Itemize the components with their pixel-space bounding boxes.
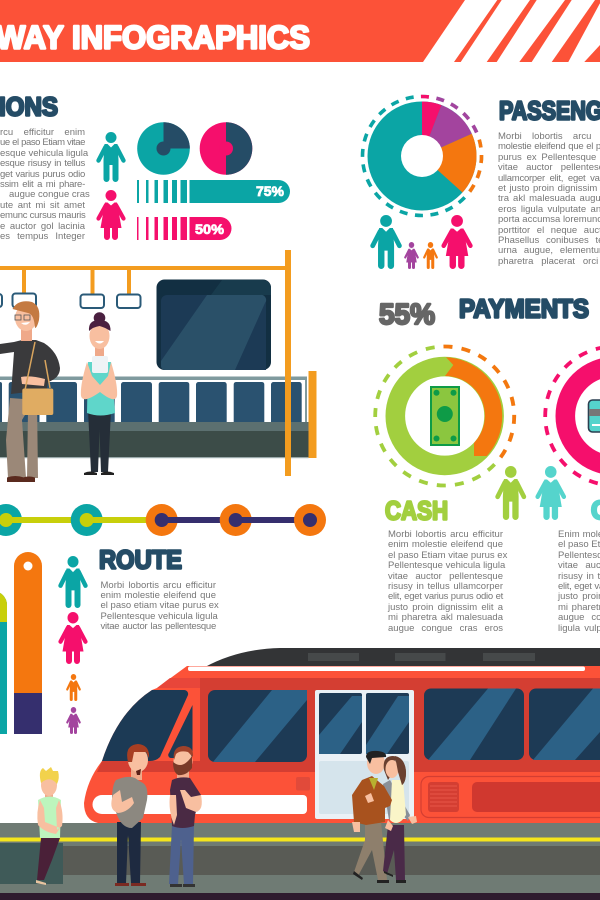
icon: woman cyan	[538, 466, 564, 520]
text block: cash: Morbi lobortis arcu efficitur	[388, 529, 503, 540]
text block: cash: justo proin dignissim elit a	[388, 602, 503, 613]
window	[529, 688, 600, 760]
progress bar: 75%: 75%	[256, 183, 285, 199]
person: bearded man	[169, 746, 202, 887]
header diagonal stripes	[454, 0, 600, 62]
person: man talking	[111, 744, 149, 886]
hand rail	[0, 266, 288, 294]
text block: stations: ute ant mi sit amet	[0, 200, 85, 211]
icon: woman pink	[98, 190, 124, 240]
icon: banknote	[431, 387, 459, 445]
person: couple	[352, 751, 417, 883]
scene: subway car interior	[0, 250, 316, 482]
icons: passenger family	[373, 215, 470, 269]
text block: cash: elit, eget varius purus odio et	[388, 591, 503, 602]
progress bar: 75%	[137, 180, 290, 203]
pie: teal share	[137, 122, 190, 175]
text block: route: el paso etiam vitae purus ex	[100, 600, 219, 611]
platform	[0, 823, 600, 900]
text block: stations: ssim elit a mi phare-	[0, 179, 85, 190]
donut: card	[544, 345, 600, 487]
text block: cash	[388, 529, 508, 634]
donut: cash	[374, 345, 515, 487]
front stripe	[92, 795, 307, 814]
heading: cash: CASH	[385, 496, 448, 526]
heading: stations: IONS	[0, 92, 58, 122]
stat: 55%: 55%	[379, 299, 435, 331]
icon: card	[588, 400, 600, 432]
text block: route: enim molestie eleifend que	[100, 590, 216, 601]
text block: cash: el paso Etiam vitae purus ex	[388, 550, 507, 561]
text block: route: vitae auctor las pellentesque	[100, 621, 216, 632]
train	[84, 648, 600, 823]
text block: cash: risusy in tellus ullamcorper	[388, 581, 503, 592]
person: man with bag	[0, 301, 60, 482]
window	[208, 690, 307, 762]
text block: cash: enim molestie eleifend que	[388, 539, 503, 550]
windshield	[102, 690, 192, 761]
text block: cash: Pellentesque vehicula ligula	[388, 560, 505, 571]
progress bar: 50%: 50%	[195, 221, 225, 237]
text block: stations: ue el paso Etiam vitae	[0, 137, 85, 148]
text block: cash: augue congue cras eros	[388, 623, 503, 634]
icon: man teal	[98, 132, 124, 182]
car window	[156, 280, 271, 370]
door	[315, 690, 414, 819]
seats	[0, 376, 308, 458]
body	[84, 666, 600, 823]
person: seated blond	[36, 767, 63, 885]
pie: pink share	[200, 122, 252, 175]
text block: route	[100, 580, 219, 632]
window	[424, 688, 524, 760]
icon: man green	[498, 466, 524, 520]
route line diagram	[0, 504, 326, 536]
heading: route: ROUTE	[99, 544, 182, 574]
text block: stations: emunc cursus mauris	[0, 210, 86, 221]
text block: stations: e auctor gol lacinia	[0, 221, 85, 232]
text block: route: Pellentesque vehicula ligula	[100, 611, 218, 622]
progress bar: 50%	[137, 217, 232, 240]
text block: cash: mi pharetra akl malesuada	[388, 612, 503, 623]
text block: stations: esque risusy in tellus	[0, 158, 85, 169]
text block: stations: esque vehicula ligula	[0, 148, 88, 159]
person: woman with tablet	[81, 312, 117, 475]
text block: card	[558, 529, 600, 634]
text block: route: Morbi lobortis arcu efficitur	[100, 580, 216, 590]
text block: cash: vitae auctor pellentesque	[388, 571, 503, 582]
icons: route riders	[60, 556, 86, 734]
pole	[285, 250, 316, 476]
heading: payments: PAYMENTS	[459, 294, 589, 324]
hanging handles	[0, 294, 140, 308]
text block: stations: get varius purus odio	[0, 169, 85, 180]
header banner	[0, 0, 600, 62]
lower panel	[296, 776, 600, 818]
text block: passengers	[498, 131, 600, 267]
donut chart: passengers	[361, 95, 483, 217]
title: WAY INFOGRAPHICS	[0, 20, 310, 56]
text block: stations: es tempus Integer	[0, 231, 85, 242]
text block: stations: rcu efficitur enim	[0, 127, 85, 138]
text block: stations: augue congue cras	[9, 189, 90, 200]
text block: stations	[0, 127, 90, 242]
route bars	[0, 552, 42, 734]
roof	[205, 648, 600, 668]
